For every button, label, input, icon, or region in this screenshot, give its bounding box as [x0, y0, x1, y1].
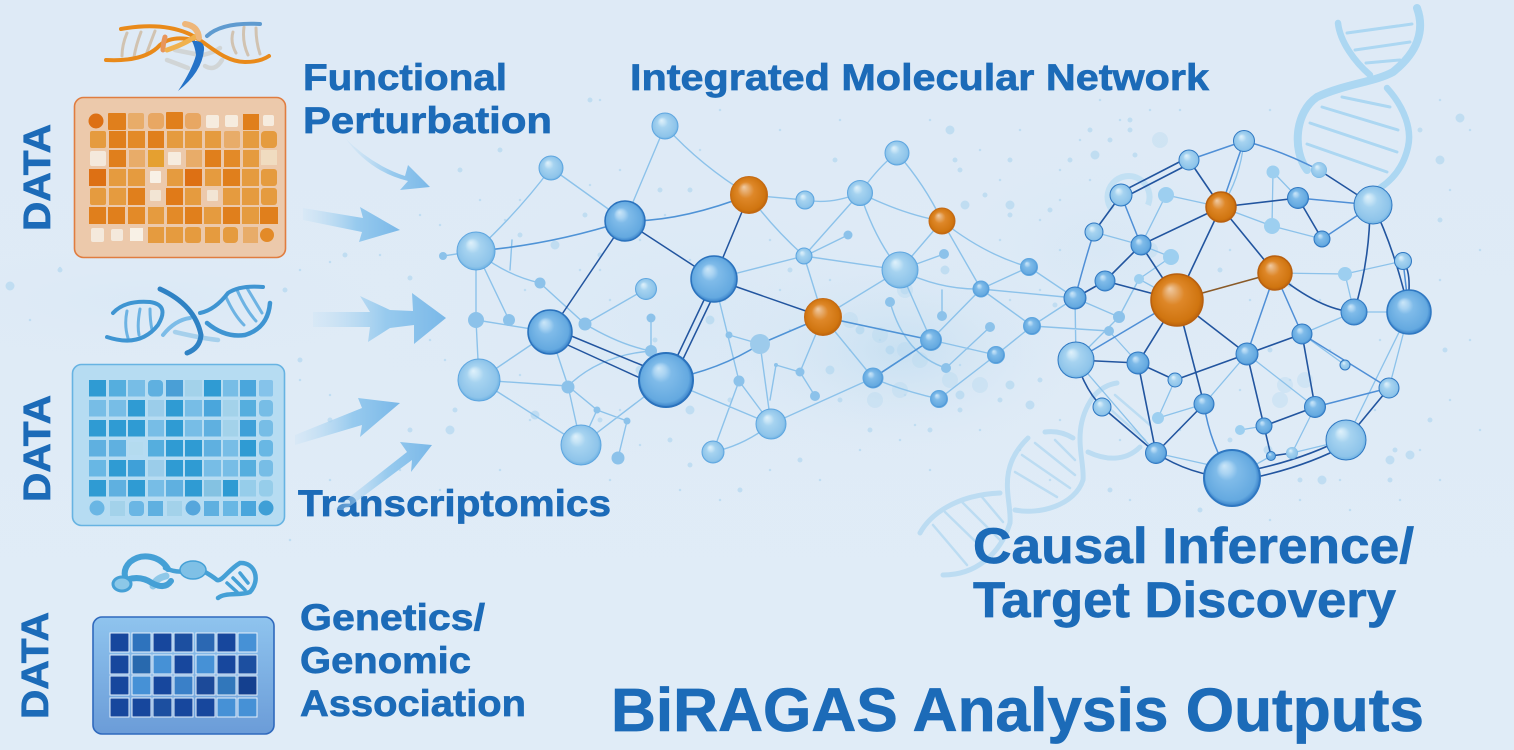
icon: large DNA helix top right [1298, 8, 1420, 188]
chart: causal inference sphere network [1058, 130, 1431, 506]
arrow: third large [313, 293, 446, 344]
heading: genetics genomic association: Association [300, 683, 526, 724]
heading: genetics genomic association: Genomic [300, 640, 471, 681]
icon: faint ring behind sphere [1108, 176, 1150, 210]
heading: transcriptomics: Transcriptomics [298, 483, 611, 524]
sphere orange nodes [1151, 192, 1292, 326]
sphere blue nodes [1058, 130, 1431, 506]
heading: genetics genomic association: Genetics/ [300, 597, 485, 638]
orange nodes [730, 176, 955, 336]
heading: causal inference target discovery: Causal Inference/ [973, 518, 1414, 574]
panel: orange heatmap [74, 98, 286, 258]
heading: causal inference target discovery: Target Discovery [973, 572, 1396, 628]
heading: functional perturbation [303, 57, 552, 141]
icon: orange DNA strand [106, 24, 269, 91]
blue nodes [457, 113, 1040, 465]
heading: causal inference target discovery [973, 518, 1414, 628]
panel: blue heatmap [72, 364, 284, 526]
small nodes [439, 230, 1125, 464]
arrow: second [303, 207, 400, 242]
arrow: fourth [295, 398, 400, 445]
icon: blue DNA strand [107, 287, 270, 353]
title: BiRAGAS Analysis Outputs [611, 676, 1424, 744]
sphere light small nodes [1134, 166, 1352, 435]
label: DATA bottom: DATA [15, 612, 57, 719]
heading: integrated molecular network: Integrated Molecular Network [630, 57, 1209, 98]
label: DATA top: DATA [17, 124, 59, 231]
heading: functional perturbation: Functional [303, 57, 507, 98]
icon: genomic loop strand [113, 556, 256, 598]
sphere edges [1075, 141, 1409, 482]
arrow: top thin [345, 138, 430, 190]
chart: integrated molecular network [439, 113, 1139, 465]
network edges [443, 126, 1139, 458]
panel: dark blue heatmap [93, 617, 274, 734]
heading: genetics genomic association [300, 597, 526, 724]
icon: faint DNA helix lower right [920, 383, 1150, 575]
arrow: fifth thin [333, 442, 432, 510]
heading: functional perturbation: Perturbation [303, 100, 552, 141]
label: DATA middle: DATA [17, 395, 59, 502]
